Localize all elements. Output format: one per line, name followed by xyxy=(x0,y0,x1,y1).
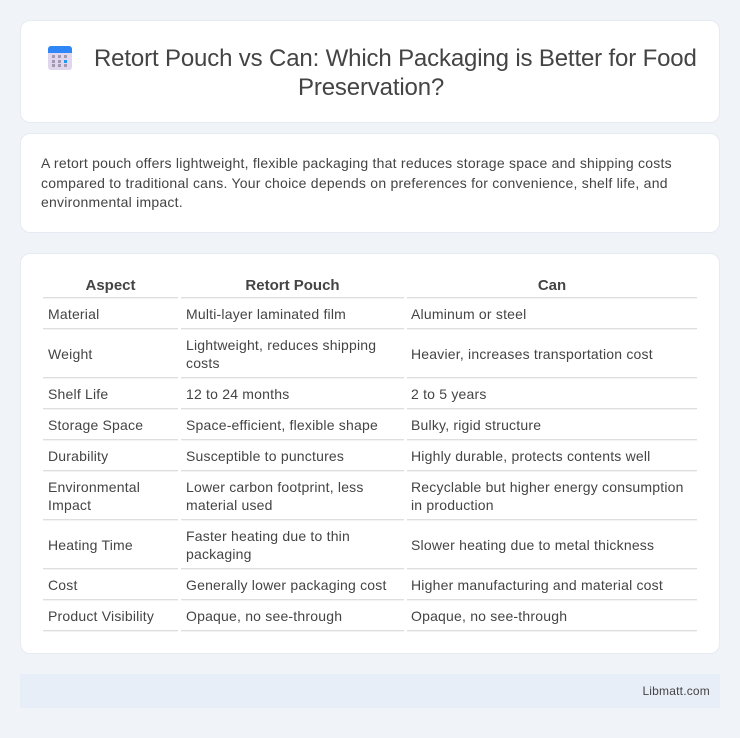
row: cost: Higher manufacturing and material cost xyxy=(411,577,663,593)
row: durability xyxy=(48,448,650,464)
row: environmental impact: in production xyxy=(411,497,494,513)
row: storage space: Bulky, rigid structure xyxy=(411,417,541,433)
row: weight: Weight xyxy=(48,346,93,362)
row: weight: costs xyxy=(186,355,220,371)
icon: calendar xyxy=(48,46,72,70)
text block: intro xyxy=(41,155,672,210)
row: storage space xyxy=(48,417,541,433)
text block: intro: compared to traditional cans. Your choice depends on preferences for convenience, shelf life, and xyxy=(41,174,668,190)
row: cost: Cost xyxy=(48,577,78,593)
row: shelf life xyxy=(48,386,487,402)
row: environmental impact: Impact xyxy=(48,497,91,513)
row: product visibility: Opaque, no see-through xyxy=(186,608,342,624)
row: product visibility: Opaque, no see-through xyxy=(411,608,567,624)
footer: Libmatt.com xyxy=(642,684,710,698)
row: heating time xyxy=(48,528,654,562)
row: environmental impact: Lower carbon footprint, less xyxy=(186,479,364,495)
text block: intro: A retort pouch offers lightweight, flexible packaging that reduces storage space and shipping costs xyxy=(41,155,672,171)
row: heating time: packaging xyxy=(186,546,252,562)
text block: intro: environmental impact. xyxy=(41,194,183,210)
row: environmental impact: Recyclable but higher energy consumption xyxy=(411,479,684,495)
row: cost xyxy=(48,577,663,593)
title xyxy=(94,45,697,101)
row: durability: Durability xyxy=(48,448,108,464)
row: storage space: Storage Space xyxy=(48,417,143,433)
panel: intro card xyxy=(20,133,720,233)
row: storage space: Space-efficient, flexible shape xyxy=(186,417,378,433)
row: weight xyxy=(48,337,653,371)
row: product visibility: Product Visibility xyxy=(48,608,154,624)
row: environmental impact: Environmental xyxy=(48,479,140,495)
row: material: Material xyxy=(48,306,99,322)
row: durability: Susceptible to punctures xyxy=(186,448,344,464)
text: Preservation? xyxy=(298,74,444,101)
row: durability: Highly durable, protects contents well xyxy=(411,448,650,464)
row: heating time: Faster heating due to thin xyxy=(186,528,350,544)
row: product visibility xyxy=(48,608,567,624)
row: shelf life: 2 to 5 years xyxy=(411,386,487,402)
footer xyxy=(20,674,720,708)
panel: title card xyxy=(20,20,720,123)
table header xyxy=(85,277,566,294)
row: material: Multi-layer laminated film xyxy=(186,306,346,322)
row: heating time: Heating Time xyxy=(48,537,133,553)
row: cost: Generally lower packaging cost xyxy=(186,577,387,593)
table header: Retort Pouch xyxy=(245,277,340,294)
table header: Can xyxy=(538,277,566,294)
text: Retort Pouch vs Can: Which Packaging is Better for Food xyxy=(94,45,697,72)
row: environmental impact: material used xyxy=(186,497,273,513)
row: weight: Lightweight, reduces shipping xyxy=(186,337,376,353)
row: weight: Heavier, increases transportation cost xyxy=(411,346,653,362)
row: material xyxy=(48,306,526,322)
row: shelf life: 12 to 24 months xyxy=(186,386,289,402)
row: material: Aluminum or steel xyxy=(411,306,526,322)
table header: Aspect xyxy=(85,277,136,294)
row: environmental impact xyxy=(48,479,684,513)
row: shelf life: Shelf Life xyxy=(48,386,108,402)
panel: comparison table card xyxy=(20,253,720,654)
row: heating time: Slower heating due to metal thickness xyxy=(411,537,654,553)
